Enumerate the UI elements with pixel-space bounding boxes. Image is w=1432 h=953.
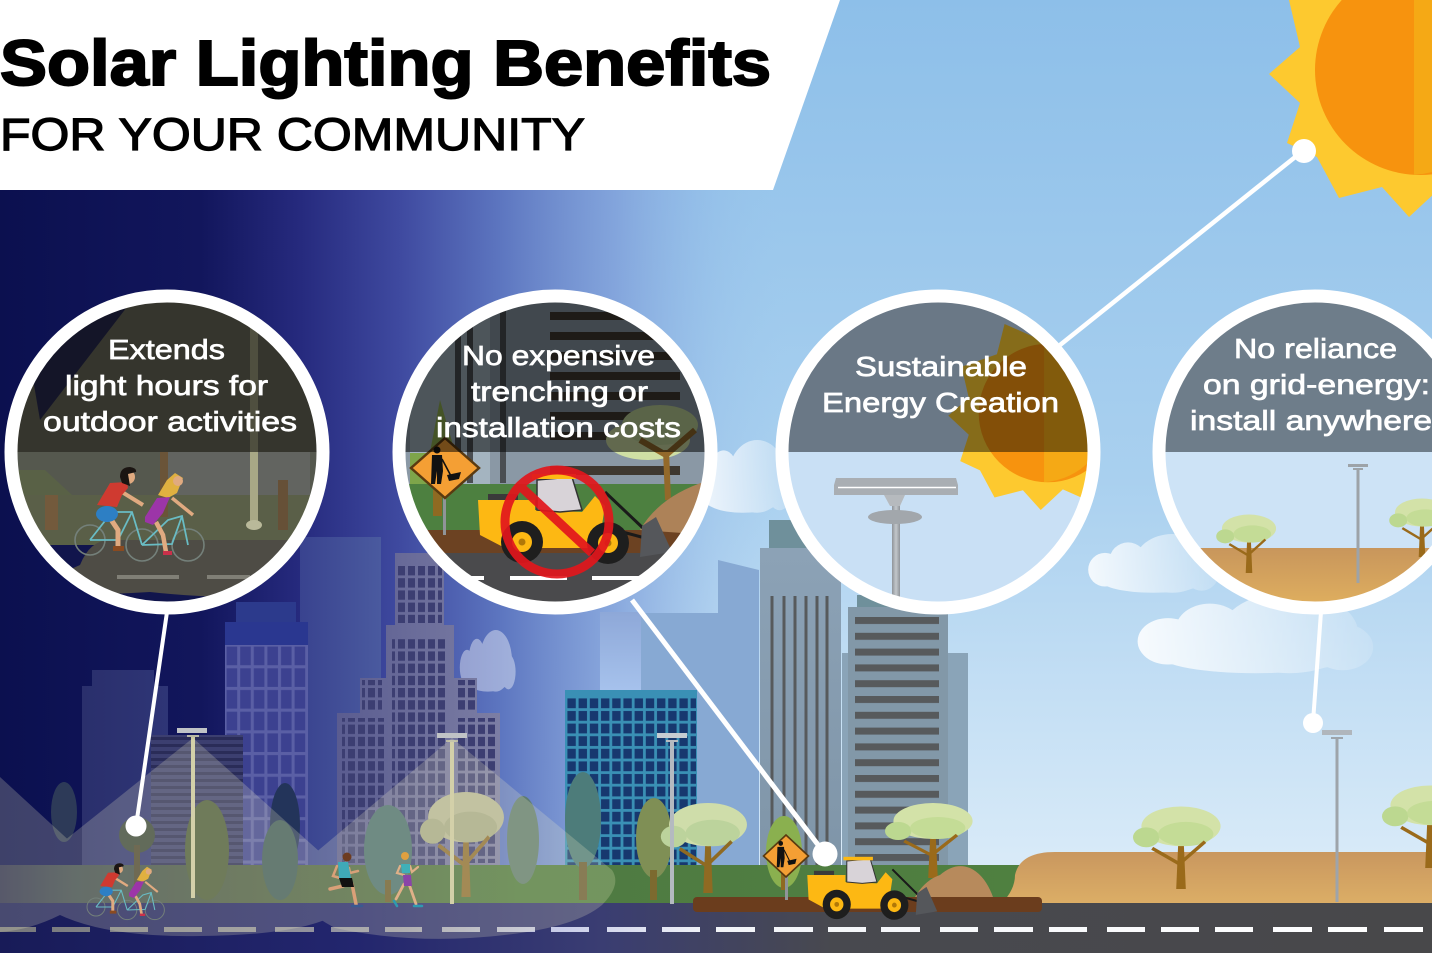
road [0, 903, 1432, 953]
building: pale sky towers [600, 560, 759, 870]
scene: night park [18, 302, 316, 602]
sand ground [1001, 852, 1432, 904]
trench [693, 897, 1042, 912]
dark text band [406, 302, 704, 452]
road dashes [0, 927, 1423, 932]
trees [1216, 498, 1432, 573]
building: glass tower [225, 602, 308, 870]
label: outdoor activities [43, 406, 297, 437]
ring [399, 296, 711, 608]
ring [782, 296, 1094, 608]
subtitle: FOR YOUR COMMUNITY [0, 109, 585, 160]
text band [1166, 302, 1432, 452]
panel: sustainable energy [776, 290, 1100, 614]
label: light hours for [65, 370, 268, 401]
scene: roadworks [406, 302, 704, 602]
label: Energy Creation [822, 387, 1059, 418]
dark text band [18, 302, 316, 452]
runner: man [330, 852, 362, 906]
label: on grid-energy: [1203, 369, 1430, 400]
street lamps [177, 728, 1352, 904]
desert ground [1200, 548, 1430, 602]
road work sign [411, 438, 479, 498]
road work sign [764, 835, 808, 900]
building: grey striped tower [760, 520, 841, 868]
sun [1269, 0, 1432, 217]
sun [948, 324, 1088, 510]
solar lamp [834, 478, 958, 596]
ground [0, 865, 1040, 905]
clouds [460, 440, 1373, 692]
building: teal glass block [565, 690, 697, 866]
label: No reliance [1234, 333, 1397, 364]
panel: no trenching [390, 290, 720, 618]
light cones [0, 738, 615, 939]
building: low slatted block [151, 735, 243, 870]
panel: extends light hours [0, 290, 340, 620]
building: central skyscraper [337, 553, 500, 870]
cyclists [75, 467, 204, 561]
building: grey slatted tower [842, 595, 968, 868]
ring [11, 296, 323, 608]
small cyclists [87, 863, 164, 920]
title: Solar Lighting Benefits [0, 27, 771, 99]
connector: sun line [1060, 139, 1316, 345]
connector: roadwork line [632, 600, 838, 866]
building: tall pale tower [300, 537, 381, 872]
label: install anywhere [1190, 405, 1432, 436]
label: installation costs [436, 412, 681, 443]
prohibited symbol [505, 470, 609, 574]
connector: community lamp line [126, 612, 167, 836]
title panel [0, 0, 840, 190]
label: No expensive [462, 340, 655, 371]
label: Extends [108, 334, 225, 365]
label: Sustainable [855, 351, 1027, 382]
lamp [1348, 464, 1368, 583]
city skyline [82, 520, 968, 872]
dirt pile [915, 866, 993, 897]
building: dim left block [82, 670, 168, 870]
runner: woman [394, 852, 422, 906]
bulldozer [478, 474, 672, 564]
connector: grid line [1303, 612, 1323, 733]
text band [788, 302, 1088, 452]
bulldozer [807, 857, 937, 920]
panel: no grid reliance [1150, 290, 1432, 620]
label: trenching or [471, 376, 648, 407]
ring [1159, 296, 1432, 608]
trees and shrubs [51, 772, 1432, 902]
